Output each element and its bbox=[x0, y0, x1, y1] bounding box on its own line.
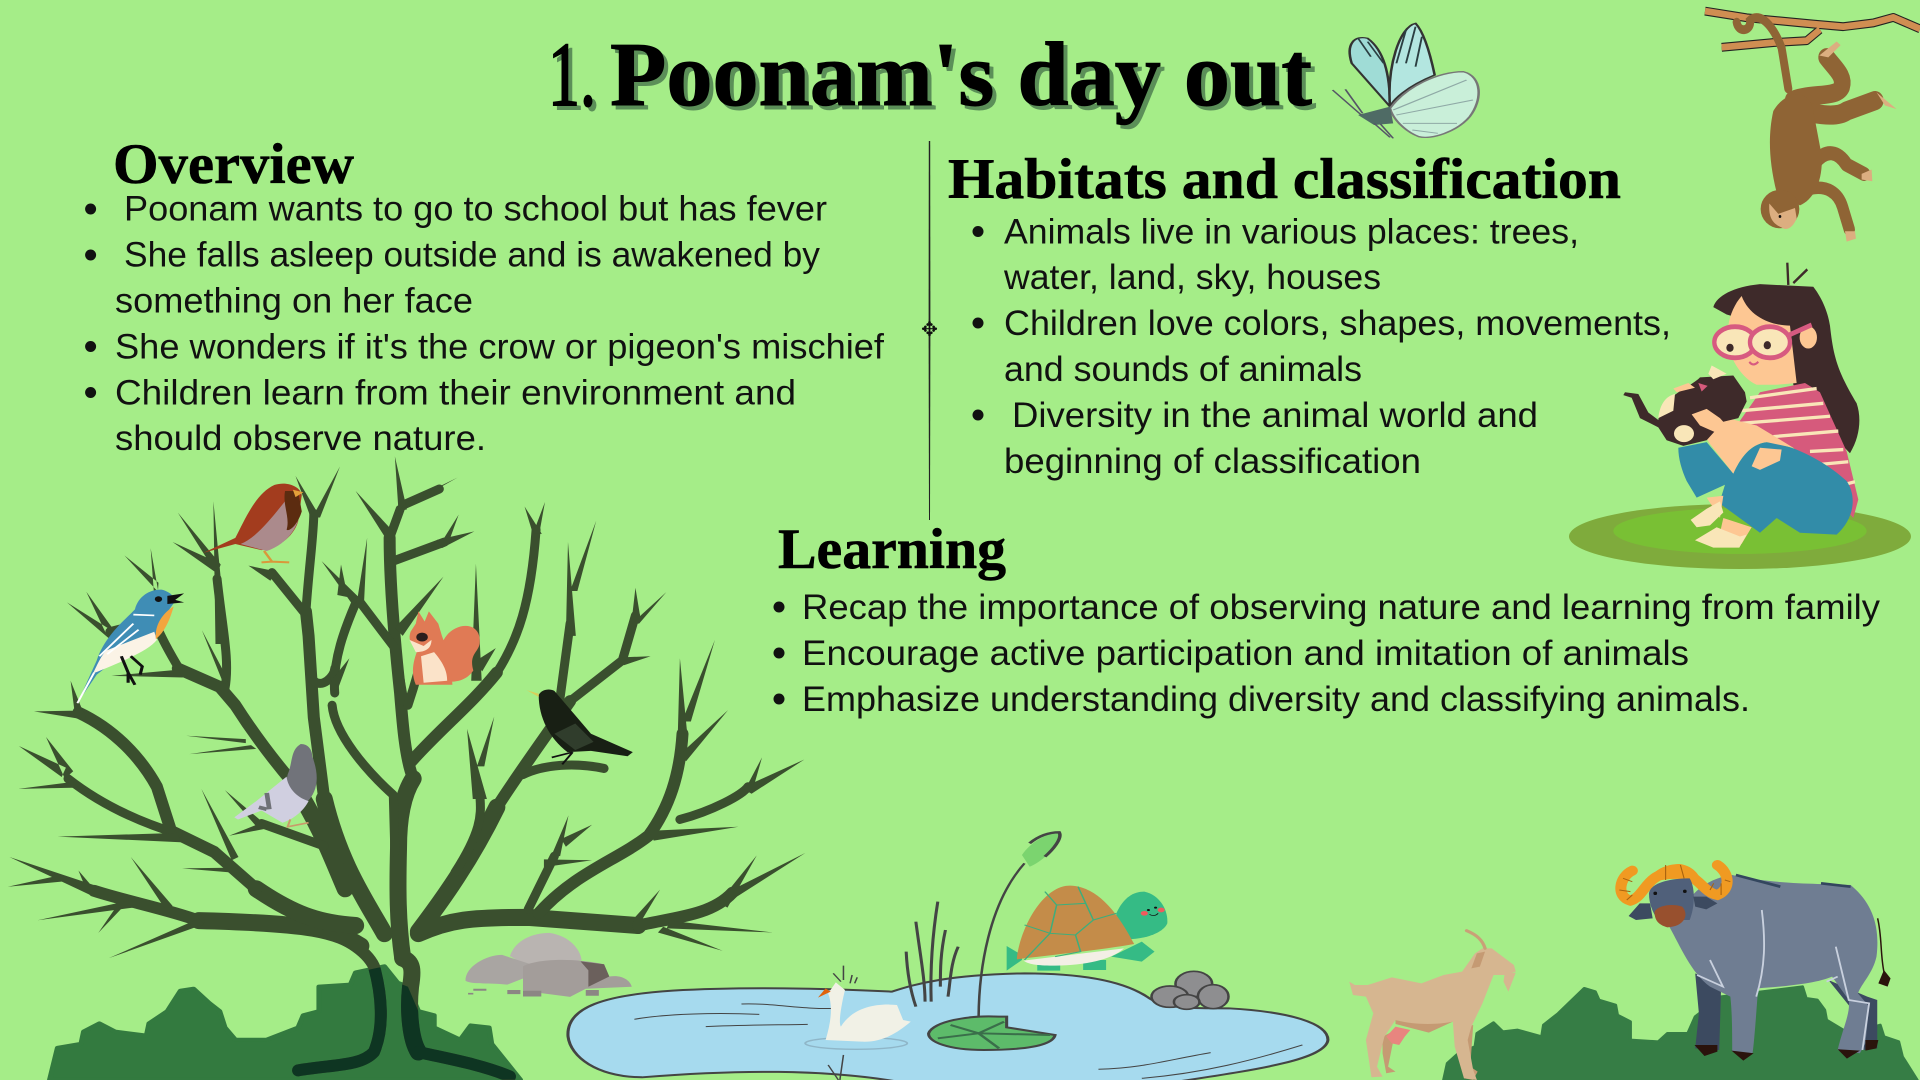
heading: overview: Overview bbox=[113, 133, 354, 196]
jeans bbox=[1678, 442, 1853, 535]
panel: learning bbox=[774, 518, 1881, 719]
habitats bullet points: and sounds of animals bbox=[1004, 350, 1362, 389]
glasses bbox=[1714, 327, 1756, 358]
icon: bluebird bbox=[77, 590, 184, 703]
icon: girl holding cat on grass bbox=[1569, 263, 1911, 569]
habitats bullet points: beginning of classification bbox=[1004, 442, 1421, 481]
overview bullet points: Poonam wants to go to school but has fever bbox=[124, 190, 827, 228]
icon: water buffalo bbox=[1619, 864, 1891, 1061]
lily pad bbox=[929, 1016, 1055, 1050]
overview bullet points: She falls asleep outside and is awakened by bbox=[124, 236, 820, 274]
overview bullet points: Children learn from their environment and bbox=[115, 374, 796, 412]
overview bullet points bbox=[85, 190, 884, 458]
icon: rocks bbox=[465, 933, 632, 997]
panel: habitats and classification bbox=[948, 148, 1671, 481]
overview bullet points: She wonders if it's the crow or pigeon's mischief bbox=[115, 328, 884, 366]
overview bullet points: should observe nature. bbox=[115, 419, 486, 458]
habitats bullet points: Animals live in various places: trees, bbox=[1004, 212, 1579, 252]
cat bbox=[1623, 366, 1747, 446]
learning bullet points: Emphasize understanding diversity and classifying animals. bbox=[802, 680, 1750, 719]
title: 1. bbox=[548, 24, 596, 125]
bottom grass bbox=[828, 1055, 843, 1080]
left bush bbox=[50, 966, 520, 1080]
learning bullet points: Recap the importance of observing nature and learning from family bbox=[802, 588, 1881, 627]
icon: monkey hanging from branch bbox=[1705, 11, 1920, 242]
bare tree bbox=[8, 456, 805, 1076]
grass mound bbox=[1569, 504, 1911, 569]
tree scene with birds, squirrel and rocks bbox=[8, 456, 805, 1080]
learning bullet points: Encourage active participation and imitation of animals bbox=[802, 634, 1689, 673]
ear bbox=[1800, 326, 1817, 349]
icon: blackbird bbox=[527, 690, 633, 764]
habitats bullet points: Children love colors, shapes, movements, bbox=[1004, 304, 1671, 343]
shirt bbox=[1737, 383, 1858, 518]
icon: pigeon bbox=[234, 744, 317, 827]
heading: habitats and classification: Habitats and classification bbox=[948, 148, 1621, 211]
skin arm and knee bbox=[1692, 414, 1793, 544]
icon: turtle bbox=[1007, 886, 1167, 971]
icon: squirrel bbox=[410, 611, 480, 685]
icon: grey stones bbox=[1151, 971, 1228, 1009]
icon: sparrow bbox=[203, 484, 303, 562]
face bbox=[1727, 296, 1797, 385]
reeds bbox=[906, 902, 958, 1007]
heading: learning: Learning bbox=[778, 518, 1006, 581]
habitats bullet points bbox=[972, 212, 1671, 481]
right bush bbox=[1444, 987, 1917, 1080]
tapered branch tips bbox=[8, 456, 805, 958]
habitats bullet points: water, land, sky, houses bbox=[1003, 258, 1381, 297]
title: Poonam's day out bbox=[610, 24, 1312, 125]
cattail plant bbox=[979, 832, 1060, 1020]
icon: goat bbox=[1349, 931, 1516, 1080]
icon: butterfly bbox=[1333, 23, 1479, 138]
shoes bbox=[1691, 501, 1747, 548]
habitats bullet points: Diversity in the animal world and bbox=[1012, 396, 1538, 435]
pond scene bbox=[568, 832, 1328, 1080]
overview bullet points: something on her face bbox=[115, 282, 473, 320]
goat and buffalo scene bbox=[1349, 864, 1917, 1080]
divider line with move handle: ✥ bbox=[921, 317, 938, 341]
panel: overview bbox=[85, 133, 884, 458]
icon: swan bbox=[805, 966, 911, 1049]
hair bbox=[1713, 284, 1859, 453]
pond ripples bbox=[634, 1004, 1302, 1078]
pond water bbox=[568, 973, 1328, 1080]
trunk over bush bbox=[298, 958, 510, 1076]
learning bullet points bbox=[774, 588, 1881, 719]
